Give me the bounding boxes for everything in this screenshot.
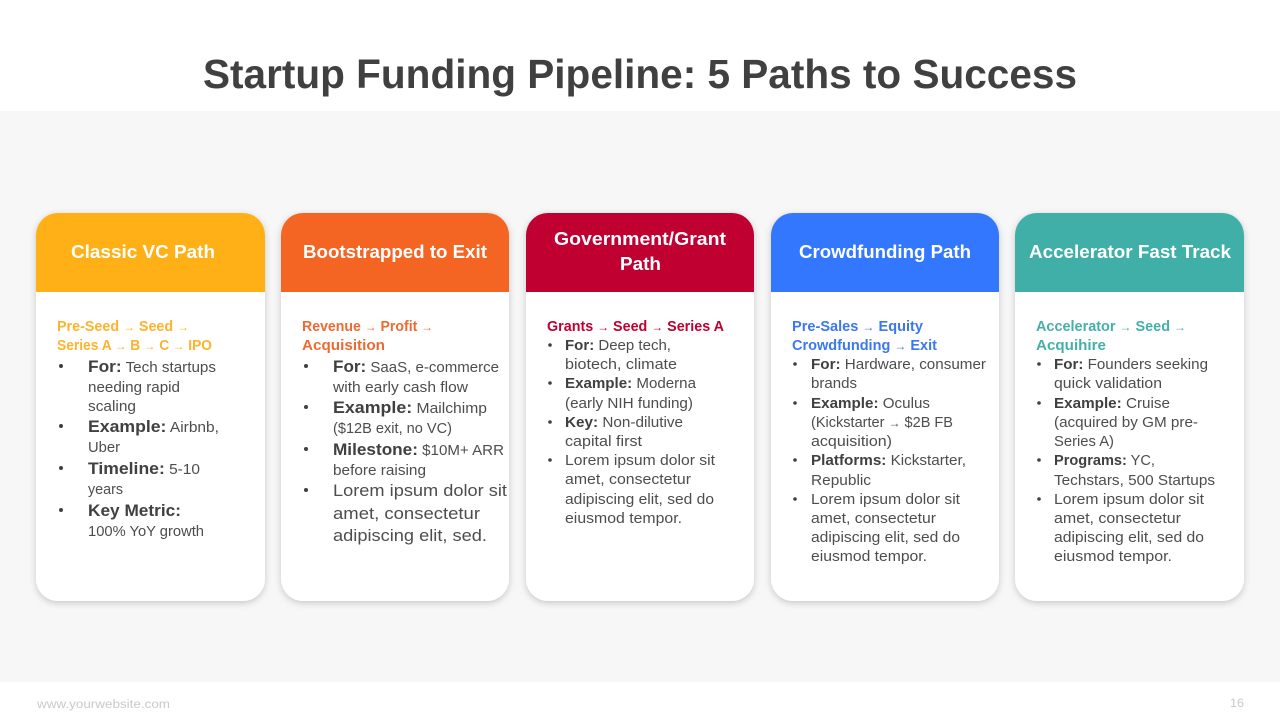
funding sequence: Pre-Sales → Equity <box>792 319 923 335</box>
bullet list: Uber <box>88 440 120 456</box>
card header: Crowdfunding Path <box>799 242 971 262</box>
bullet list: Series A) <box>1054 434 1114 450</box>
funding sequence: Acquihire <box>1036 338 1106 354</box>
panel: Accelerator Fast Track <box>1015 213 1244 601</box>
card header: Accelerator Fast Track <box>1029 242 1232 262</box>
card header: Classic VC Path <box>71 242 215 262</box>
funding sequence: Crowdfunding → Exit <box>792 338 937 354</box>
page number: 16 <box>1230 696 1244 710</box>
bullet list: biotech, climate <box>565 357 677 373</box>
bullet list: amet, consectetur <box>333 504 480 523</box>
bullet list: Programs: YC, <box>1054 453 1155 469</box>
funding sequence <box>302 319 433 354</box>
bullet list <box>59 358 219 540</box>
bullet list: For: Deep tech, <box>565 338 671 354</box>
funding sequence: Series A → B → C → IPO <box>57 338 212 354</box>
funding sequence <box>57 319 212 354</box>
bullet list: Key Metric: <box>88 502 181 520</box>
bullet list: with early cash flow <box>332 380 469 396</box>
bullet list: For: Tech startups <box>88 358 216 376</box>
bullet list: amet, consectetur <box>811 511 936 527</box>
card header <box>771 213 999 292</box>
bullet list: brands <box>811 376 857 392</box>
bullet list: For: Founders seeking <box>1054 357 1208 373</box>
bullet list <box>1037 357 1215 565</box>
bullet list: amet, consectetur <box>565 472 691 488</box>
funding sequence: Acquisition <box>302 338 385 354</box>
footer website: www.yourwebsite.com <box>36 699 170 711</box>
content background band <box>0 111 1280 682</box>
bullet list: needing rapid <box>88 380 180 396</box>
bullet list: capital first <box>565 434 642 450</box>
bullet list: (Kickstarter → $2B FB <box>811 415 953 431</box>
bullet list: adipiscing elit, sed. <box>333 526 487 545</box>
card body <box>526 213 754 601</box>
bullet list: For: Hardware, consumer <box>811 357 986 373</box>
card body <box>771 213 999 601</box>
bullet list: (acquired by GM pre- <box>1054 415 1198 431</box>
bullet list: Lorem ipsum dolor sit <box>1054 492 1204 508</box>
bullet list: Timeline: 5-10 <box>88 460 200 478</box>
bullet list: Key: Non-dilutive <box>565 415 683 431</box>
panel: Government/Grant Path <box>526 213 754 601</box>
panel: Bootstrapped to Exit <box>281 213 509 601</box>
bullet list: adipiscing elit, sed do <box>565 492 714 508</box>
bullet list: eiusmod tempor. <box>811 549 927 565</box>
card header <box>36 213 265 292</box>
bullet list <box>304 358 507 545</box>
title: Startup Funding Pipeline: 5 Paths to Success <box>203 51 1077 97</box>
funding sequence: Accelerator → Seed → <box>1036 319 1186 335</box>
funding sequence: Pre-Seed → Seed → <box>57 319 189 335</box>
bullet list: Lorem ipsum dolor sit <box>333 481 507 500</box>
bullet list: Republic <box>811 473 871 489</box>
card header <box>281 213 509 292</box>
bullet list: ($12B exit, no VC) <box>333 421 452 437</box>
bullet list: Example: Cruise <box>1054 396 1170 412</box>
bullet list: acquisition) <box>811 434 892 450</box>
bullet list: For: SaaS, e-commerce <box>333 358 499 376</box>
bullet list <box>548 338 715 527</box>
panel: Classic VC Path <box>36 213 265 601</box>
bullet list <box>793 357 986 565</box>
funding sequence: Revenue → Profit → <box>302 319 433 335</box>
bullet list: Lorem ipsum dolor sit <box>565 453 715 469</box>
bullet list: (early NIH funding) <box>565 396 693 412</box>
panel: Crowdfunding Path <box>771 213 999 601</box>
funding sequence: Grants → Seed → Series A <box>547 319 725 335</box>
bullet list: eiusmod tempor. <box>565 511 682 527</box>
bullet list: Example: Airbnb, <box>88 418 219 436</box>
card header: Bootstrapped to Exit <box>303 242 487 262</box>
card header: Path <box>620 254 661 274</box>
card body <box>1015 213 1244 601</box>
funding sequence <box>792 319 937 354</box>
bullet list: Platforms: Kickstarter, <box>811 453 966 469</box>
bullet list: eiusmod tempor. <box>1054 549 1172 565</box>
bullet list: 100% YoY growth <box>88 524 204 540</box>
bullet list: quick validation <box>1054 376 1162 392</box>
bullet list: scaling <box>88 399 136 415</box>
card header <box>1015 213 1244 292</box>
card body <box>36 213 265 601</box>
bullet list: before raising <box>333 463 426 479</box>
bullet list: amet, consectetur <box>1054 511 1181 527</box>
bullet list: Example: Mailchimp <box>333 399 487 417</box>
card header: Government/Grant <box>554 229 726 249</box>
bullet list: adipiscing elit, sed do <box>811 530 960 546</box>
funding sequence <box>1036 319 1186 354</box>
bullet list: Lorem ipsum dolor sit <box>811 492 960 508</box>
bullet list: Milestone: $10M+ ARR <box>333 441 504 459</box>
bullet list: Techstars, 500 Startups <box>1054 473 1215 489</box>
bullet list: years <box>88 482 123 498</box>
bullet list: adipiscing elit, sed do <box>1054 530 1204 546</box>
card body <box>281 213 509 601</box>
bullet list: Example: Moderna <box>565 376 697 392</box>
card header <box>526 213 754 292</box>
bullet list: Example: Oculus <box>811 396 930 412</box>
